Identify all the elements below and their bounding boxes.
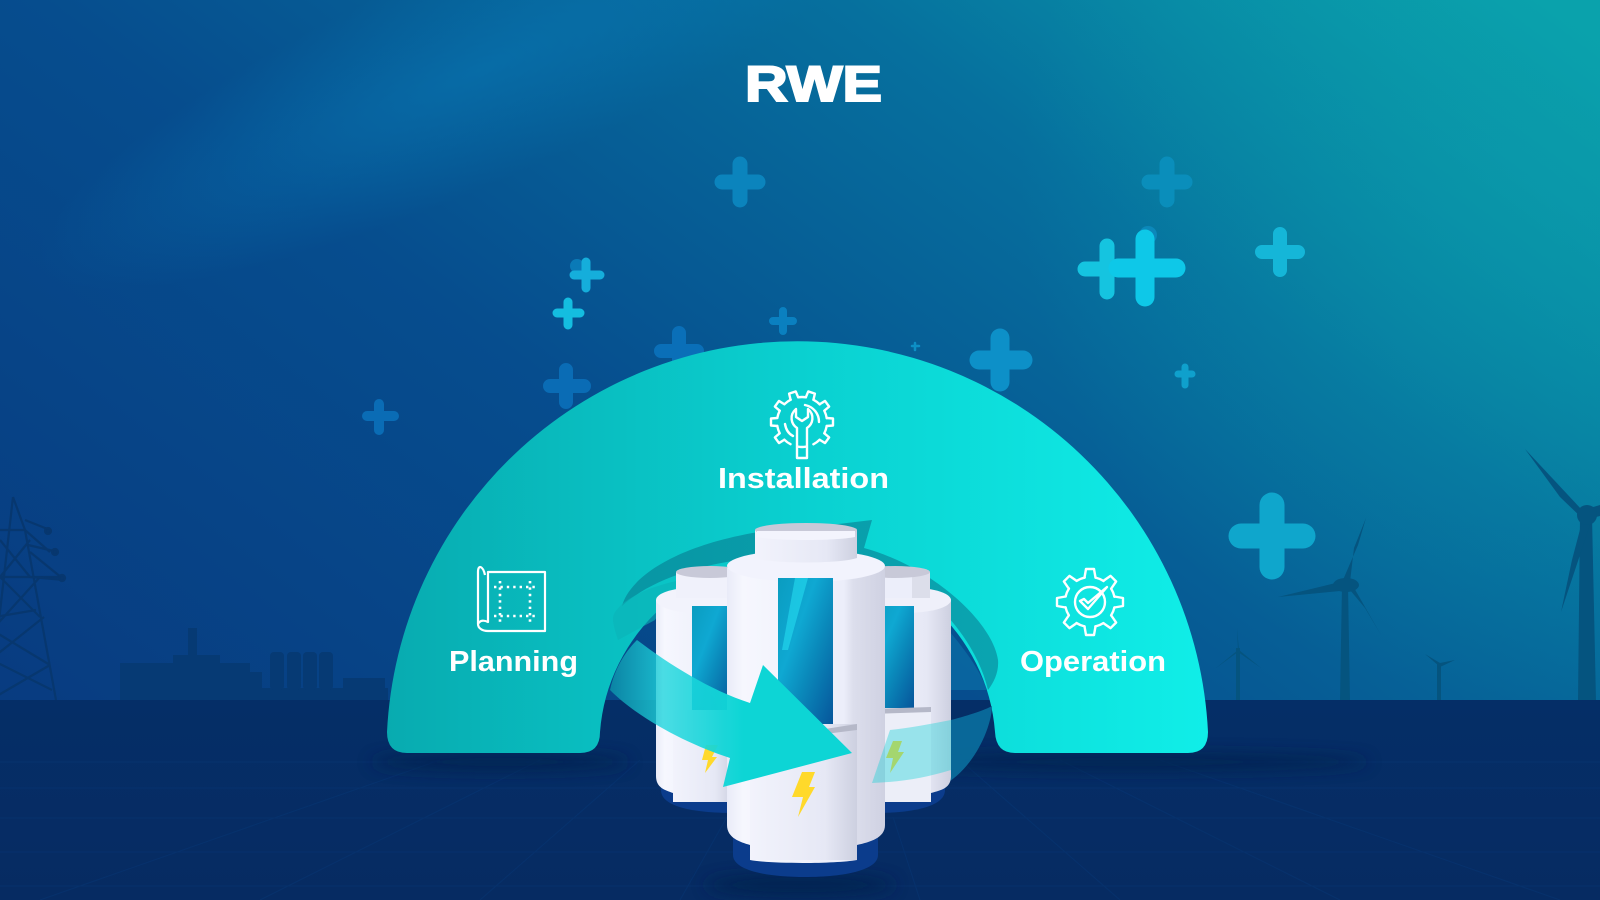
electricity pylon silhouette [0,497,65,700]
back circular arrow [613,520,998,787]
planning group [449,567,578,678]
installation group [718,391,889,495]
power plant silhouette [120,628,388,702]
label: planning: Planning [449,646,578,678]
icon: small bolt right [886,741,904,773]
plus signs [367,164,1303,567]
ground with grid [0,700,1600,900]
label: operation: Operation [1020,646,1166,678]
icon: gear with wrench [771,391,833,458]
arch panel [387,341,1208,753]
icon: blueprint [478,567,545,631]
front translucent band right [872,720,951,783]
front curved arrow [610,640,852,787]
icon: small bolt left [702,745,718,773]
label: installation: Installation [718,463,889,495]
icon: bolt center [792,772,815,817]
logo: RWE [745,56,882,112]
wind turbines silhouette [1216,449,1600,702]
icon: gear with check [1057,569,1123,635]
battery: right [859,566,951,813]
operation group [1020,569,1166,678]
battery: left [656,566,744,813]
arch shadow [370,754,1370,895]
battery: center [727,523,885,877]
